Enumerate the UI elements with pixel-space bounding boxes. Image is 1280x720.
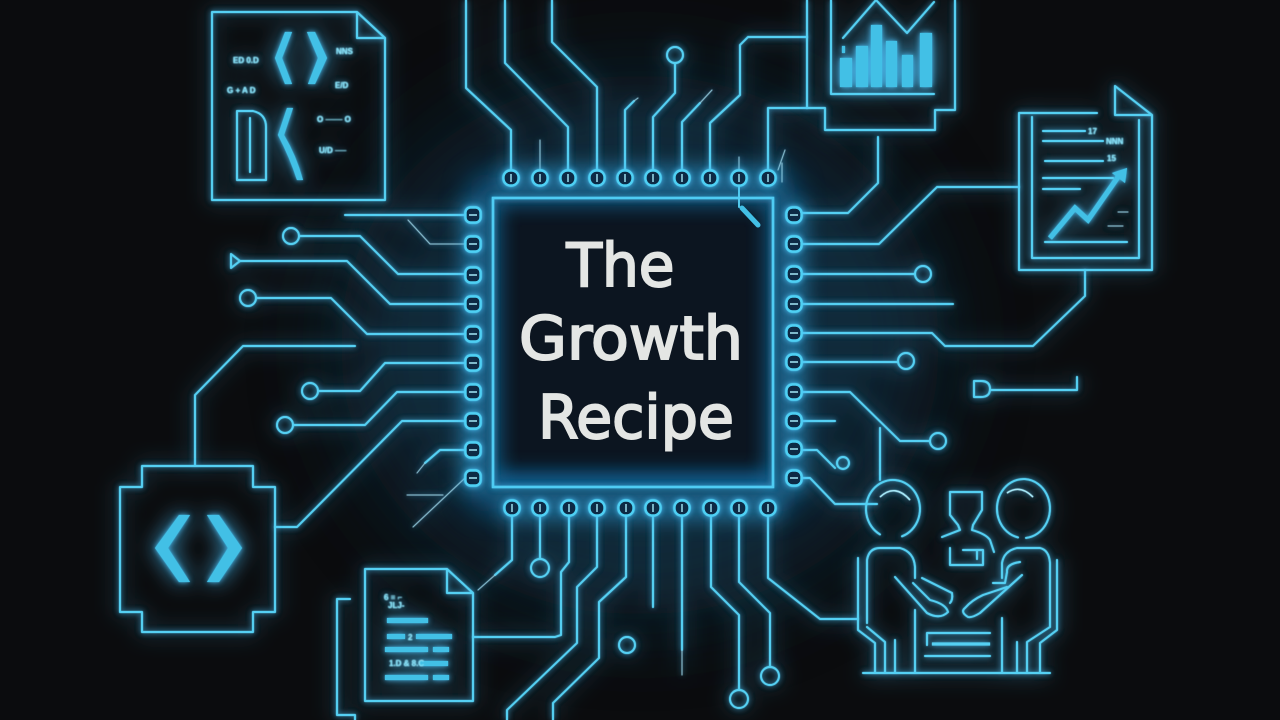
bottom traces	[337, 516, 858, 720]
icon: report document right: 17	[1088, 127, 1097, 136]
top traces	[466, 0, 807, 182]
title	[519, 231, 743, 453]
chip glow	[480, 186, 786, 500]
icon: two people at a table	[858, 479, 1057, 673]
icon: code document top left: U/D ──	[319, 146, 347, 155]
hourglass between people	[942, 492, 994, 565]
connector pads	[466, 170, 802, 516]
title: Growth	[519, 304, 743, 374]
icon: code document top left: E/D	[335, 81, 349, 90]
left traces	[195, 215, 466, 527]
title: The	[566, 231, 674, 301]
icon: bar chart top right	[807, 0, 955, 130]
icon: code chip left	[120, 466, 275, 632]
icon: code document top left: NNS	[336, 47, 354, 56]
right person	[963, 479, 1057, 672]
right traces	[801, 137, 1085, 504]
icon: code document top left: O ─── O	[317, 115, 351, 124]
top pads	[504, 170, 776, 186]
icon: document bottom: 2	[408, 633, 413, 642]
icon: code document top left: G + A D	[227, 86, 256, 95]
chart bars	[840, 25, 932, 87]
chip body	[493, 187, 773, 494]
table	[863, 633, 1050, 673]
icon: document bottom: 6 ≡ ⌐	[384, 593, 403, 602]
right pads	[786, 208, 802, 486]
title: Recipe	[538, 383, 734, 453]
icon: report document right: NNN	[1106, 137, 1124, 146]
icon: document bottom: JLJ-	[388, 601, 405, 610]
icon: code document top left	[212, 12, 385, 200]
icon: code document top left: ED 0.D	[233, 56, 259, 65]
left pads	[466, 208, 480, 486]
icon: report document right: 15	[1107, 154, 1116, 163]
icon: document bottom	[365, 569, 473, 701]
left person	[858, 480, 952, 672]
bottom pads	[504, 500, 776, 516]
icon: document bottom: 1.D & 8.C	[389, 659, 424, 668]
icon: report document right	[1019, 86, 1152, 270]
